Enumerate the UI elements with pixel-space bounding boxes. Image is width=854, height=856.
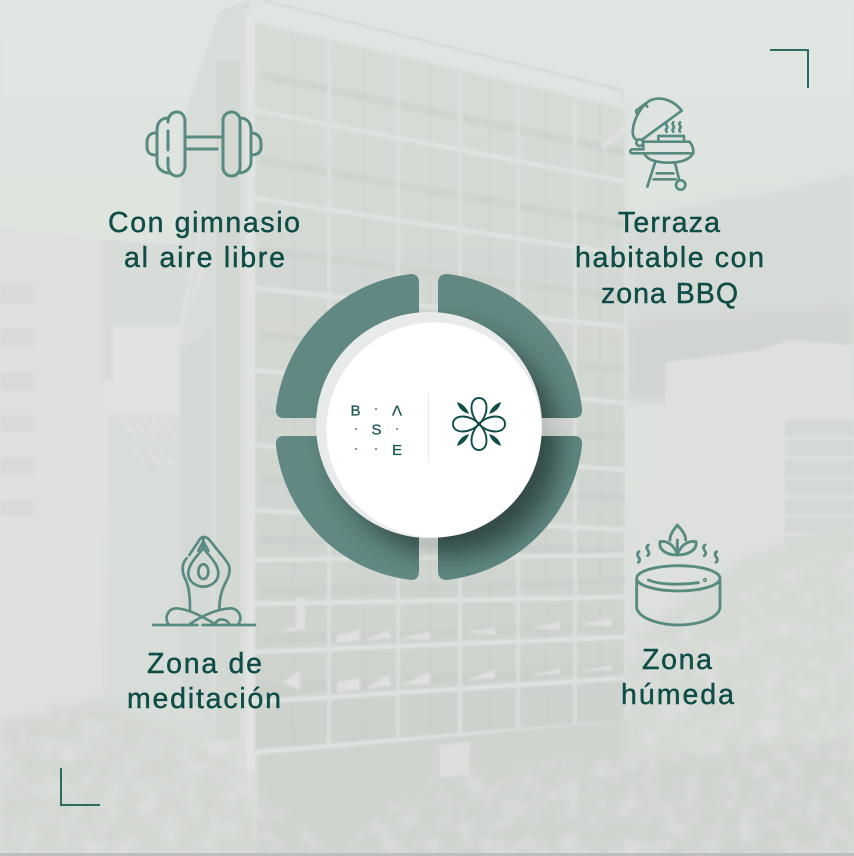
- planted wall: [216, 60, 240, 740]
- logo: BASE wordmark: S: [371, 422, 382, 438]
- heading: gym: Con gimnasio: [108, 207, 300, 239]
- distant mountain: [625, 172, 854, 400]
- heading: meditation: meditación: [127, 683, 281, 715]
- outer ring: [316, 312, 542, 538]
- heading: terrace: zona BBQ: [601, 278, 738, 310]
- icon: meditation figure: [153, 537, 255, 625]
- heading: terrace: habitable con: [575, 242, 764, 274]
- heading: meditation: [127, 648, 281, 715]
- facade: [253, 20, 627, 752]
- left neighbour tower: [0, 228, 102, 760]
- corner bracket: bottom left: [61, 768, 100, 805]
- logo: BASE wordmark: Λ: [392, 402, 402, 420]
- heading: terrace: Terraza: [618, 207, 720, 239]
- heading: meditation: Zona de: [147, 648, 262, 680]
- heading: gym: [108, 207, 300, 274]
- icon: barbecue grill: [630, 99, 693, 190]
- right foreground block: [640, 340, 854, 720]
- bottom edge strip: [0, 853, 854, 856]
- heading: wet area: Zona: [642, 644, 712, 676]
- logo: BASE wordmark: B: [350, 402, 361, 420]
- quadrant segments: [276, 274, 582, 580]
- corner bracket: top right: [770, 50, 808, 88]
- icon: wellness tub with lotus: [637, 525, 720, 625]
- logo: BASE wordmark: [350, 402, 402, 459]
- white disc: [326, 322, 542, 538]
- heading: wet area: [621, 644, 734, 711]
- logo: flower emblem: [453, 398, 505, 450]
- bright sill patches in lower windows: [280, 125, 628, 692]
- heading: gym: al aire libre: [124, 242, 285, 274]
- circle shadow: [332, 328, 559, 555]
- central donut diagram: [276, 274, 582, 580]
- icon: dumbbell: [147, 112, 261, 176]
- logo: BASE wordmark: E: [392, 442, 402, 459]
- ground floor and gardens: [258, 720, 627, 856]
- heading: wet area: húmeda: [621, 679, 734, 711]
- heading: terrace: [575, 207, 764, 310]
